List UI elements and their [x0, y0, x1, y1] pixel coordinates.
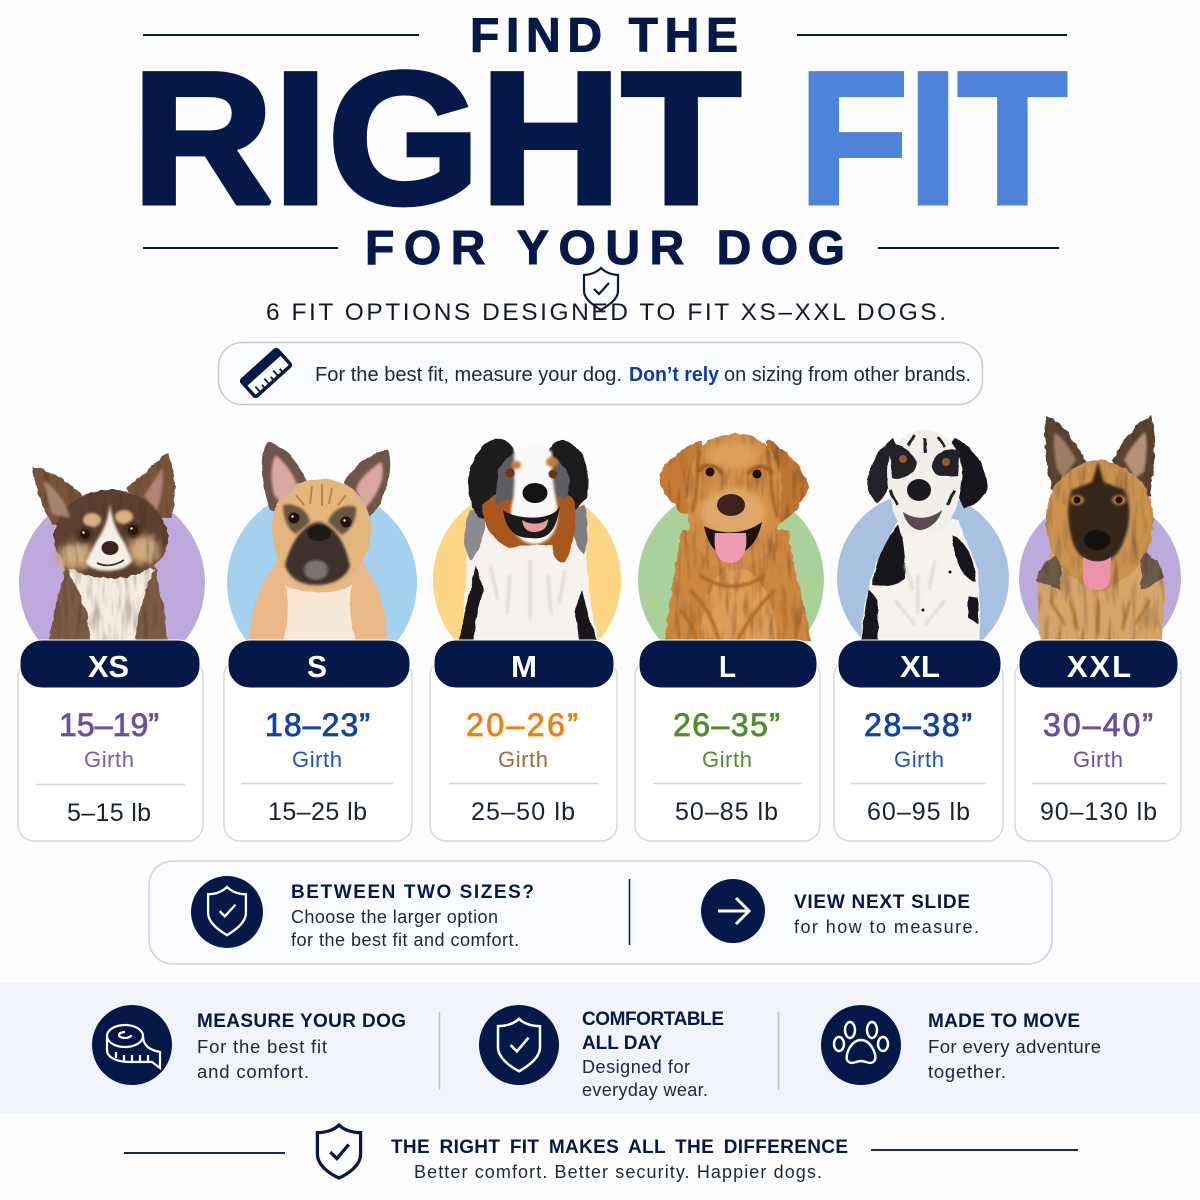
backdrop circle XXL [1019, 497, 1181, 659]
girth label M: Girth [498, 747, 548, 772]
size label XS: XS [88, 649, 129, 684]
backdrop circle S [227, 488, 417, 678]
icon: paw [821, 1005, 901, 1085]
icon: arrow badge [701, 879, 765, 943]
footer heading: THE RIGHT FIT MAKES ALL THE DIFFERENCE [391, 1137, 848, 1158]
backdrop circle M [433, 486, 621, 674]
size pill M [434, 640, 614, 688]
size label M: M [511, 649, 537, 684]
icon: shield badge [191, 876, 263, 948]
feature: comfortable all day: COMFORTABLE [582, 1009, 724, 1030]
weight M: 25–50 lb [471, 798, 575, 826]
girth label L: Girth [702, 747, 752, 772]
feature: measure your dog: MEASURE YOUR DOG [197, 1011, 406, 1032]
feature: made to move: For every adventure [928, 1036, 1101, 1057]
feature: made to move [928, 1011, 1101, 1082]
dog: golden retriever [659, 434, 812, 646]
dog: french bulldog [249, 442, 390, 646]
backdrop circle L [638, 487, 824, 673]
title word: fit: FIT [799, 33, 1067, 243]
icon: footer shield [317, 1125, 361, 1178]
advice text: between two sizes: Choose the larger option [291, 907, 498, 927]
dog: australian shepherd [458, 439, 600, 646]
weight XS: 5–15 lb [67, 799, 151, 827]
girth label XXL: Girth [1073, 747, 1123, 772]
notice text: on sizing from other brands. [724, 364, 971, 386]
title line: for your dog: FOR YOUR DOG [365, 222, 845, 275]
weight S: 15–25 lb [268, 798, 367, 826]
size card: M [430, 439, 621, 841]
feature: made to move: MADE TO MOVE [928, 1011, 1080, 1032]
title word: right: RIGHT [132, 33, 741, 243]
size label S: S [307, 649, 327, 684]
panel: feature band [0, 983, 1200, 1113]
size pill S [228, 640, 410, 688]
feature: measure your dog: For the best fit [197, 1036, 327, 1057]
title line: find the: FIND THE [470, 10, 738, 62]
size card: XL [834, 430, 1009, 841]
weight XXL: 90–130 lb [1040, 798, 1157, 826]
footer tagline: Better comfort. Better security. Happier dogs. [414, 1162, 822, 1182]
feature: made to move: together. [928, 1061, 1006, 1082]
girth value XL: 28–38” [864, 707, 972, 743]
size card: L [635, 434, 824, 841]
advice text: between two sizes [291, 882, 534, 950]
advice text: between two sizes: BETWEEN TWO SIZES? [291, 882, 534, 903]
girth value XXL: 30–40” [1043, 707, 1153, 743]
dog: great dane [860, 430, 987, 646]
dog: chihuahua [32, 453, 175, 646]
icon: comfort shield [479, 1005, 559, 1085]
notice pill [218, 342, 982, 404]
notice text: Don’t rely [629, 364, 720, 386]
size pill XXL [1019, 640, 1178, 688]
subtitle: 6 FIT OPTIONS DESIGNED TO FIT XS–XXL DOGS. [266, 299, 946, 326]
icon: small shield [584, 268, 618, 310]
dog: german shepherd [1036, 415, 1165, 646]
advice text: between two sizes: for the best fit and comfort. [291, 930, 519, 950]
girth value M: 20–26” [466, 707, 578, 743]
girth value S: 18–23” [265, 707, 370, 743]
girth label S: Girth [292, 747, 342, 772]
girth label XL: Girth [894, 747, 944, 772]
size pill XS [20, 640, 200, 688]
notice text [315, 364, 971, 386]
feature: measure your dog: and comfort. [197, 1061, 309, 1082]
size label L: L [719, 649, 736, 684]
feature: comfortable all day: everyday wear. [582, 1080, 708, 1100]
girth label XS: Girth [84, 747, 134, 772]
title [132, 10, 1067, 275]
size pill L [639, 640, 817, 688]
advice text: next slide: for how to measure. [794, 917, 979, 937]
icon: ruler [241, 349, 291, 397]
backdrop circle XL [837, 492, 1009, 664]
footer [124, 1125, 1078, 1182]
girth value L: 26–35” [673, 707, 780, 743]
weight L: 50–85 lb [675, 798, 778, 826]
icon: tape measure [92, 1005, 172, 1085]
panel: advice box [149, 861, 1052, 964]
size label XL: XL [900, 649, 940, 684]
notice text: For the best fit, measure your dog. [315, 364, 622, 386]
weight XL: 60–95 lb [867, 798, 970, 826]
feature: comfortable all day [582, 1009, 724, 1100]
feature: measure your dog [197, 1011, 406, 1082]
feature: comfortable all day: ALL DAY [582, 1033, 662, 1054]
size card: S [224, 442, 417, 841]
feature: comfortable all day: Designed for [582, 1057, 690, 1077]
backdrop circle XS [19, 490, 205, 676]
girth value XS: 15–19” [59, 707, 159, 743]
size card: XS [18, 453, 205, 841]
advice text: next slide: VIEW NEXT SLIDE [794, 892, 970, 913]
advice text: next slide [794, 892, 979, 937]
size pill XL [838, 640, 1001, 688]
size label XXL: XXL [1067, 649, 1131, 684]
size card: XXL [1015, 415, 1181, 841]
